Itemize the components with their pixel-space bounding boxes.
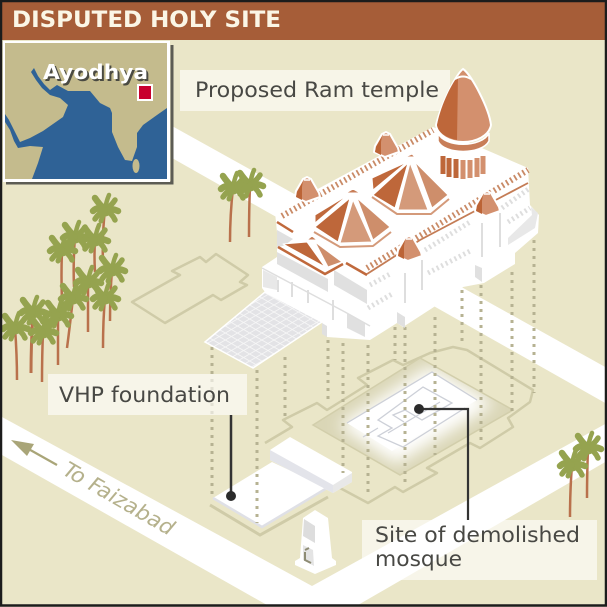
label: Proposed Ram temple xyxy=(180,70,450,111)
map shadow xyxy=(6,45,172,183)
roof railings xyxy=(282,130,433,216)
dotted projection lines xyxy=(212,240,534,523)
temple illustration xyxy=(205,69,539,368)
palm tree xyxy=(93,283,118,348)
palm tree xyxy=(61,283,86,348)
arrow: to Faizabad xyxy=(11,440,57,465)
small dome rear centre xyxy=(374,132,399,157)
palm tree xyxy=(93,195,118,262)
title bar: DISPUTED HOLY SITE xyxy=(12,8,281,33)
palm trees near temple xyxy=(221,170,263,242)
window rows and pillars xyxy=(262,188,530,326)
palm tree xyxy=(63,222,88,287)
palm tree xyxy=(31,317,56,382)
palm tree xyxy=(83,225,108,272)
site of demolished mosque xyxy=(313,358,513,475)
small dome rear left xyxy=(295,177,320,202)
road: To Faizabad and junction xyxy=(2,417,607,605)
Sri Lanka xyxy=(132,159,140,173)
palm tree xyxy=(50,235,75,302)
front left half dome xyxy=(278,236,343,274)
label: Proposed Ram temple: Proposed Ram temple xyxy=(195,78,439,103)
palm tree xyxy=(46,300,71,365)
rear octagonal dome xyxy=(372,154,449,214)
small dome front xyxy=(397,236,422,261)
leader line: mosque site xyxy=(414,404,468,520)
palm tree xyxy=(76,267,101,332)
label: Site of demolished mosque: Site of demolished xyxy=(375,523,580,548)
label: VHP foundation: VHP foundation xyxy=(59,383,230,407)
temple body xyxy=(262,127,539,340)
road label: To Faizabad: To Faizabad xyxy=(56,457,181,539)
monument pillar xyxy=(295,510,336,574)
map label shadow: Ayodhya xyxy=(45,62,150,86)
map label: Ayodhya xyxy=(43,60,148,84)
front octagonal dome xyxy=(314,189,391,247)
road: behind temple xyxy=(172,126,607,404)
Ayodhya marker xyxy=(138,85,152,100)
small dome right xyxy=(475,191,500,216)
label: VHP foundation xyxy=(48,374,247,415)
ghost outline of ground plan xyxy=(132,254,248,323)
palm tree xyxy=(21,297,46,373)
disputed site outline xyxy=(265,347,533,503)
leader line: VHP foundation xyxy=(226,415,236,501)
label: Site of demolished mosque: mosque xyxy=(375,547,462,572)
palm tree xyxy=(3,313,28,380)
locator map inset xyxy=(3,41,172,183)
main spire xyxy=(436,69,491,179)
palm trees lower right xyxy=(560,433,601,517)
sea xyxy=(5,68,167,179)
palm grove xyxy=(3,195,125,382)
shaded left faces xyxy=(263,207,538,337)
palm tree xyxy=(100,255,125,321)
title bar xyxy=(0,0,607,40)
VHP foundation platform xyxy=(210,437,352,535)
label: Site of demolished mosque xyxy=(362,520,597,580)
ramp xyxy=(205,292,322,368)
